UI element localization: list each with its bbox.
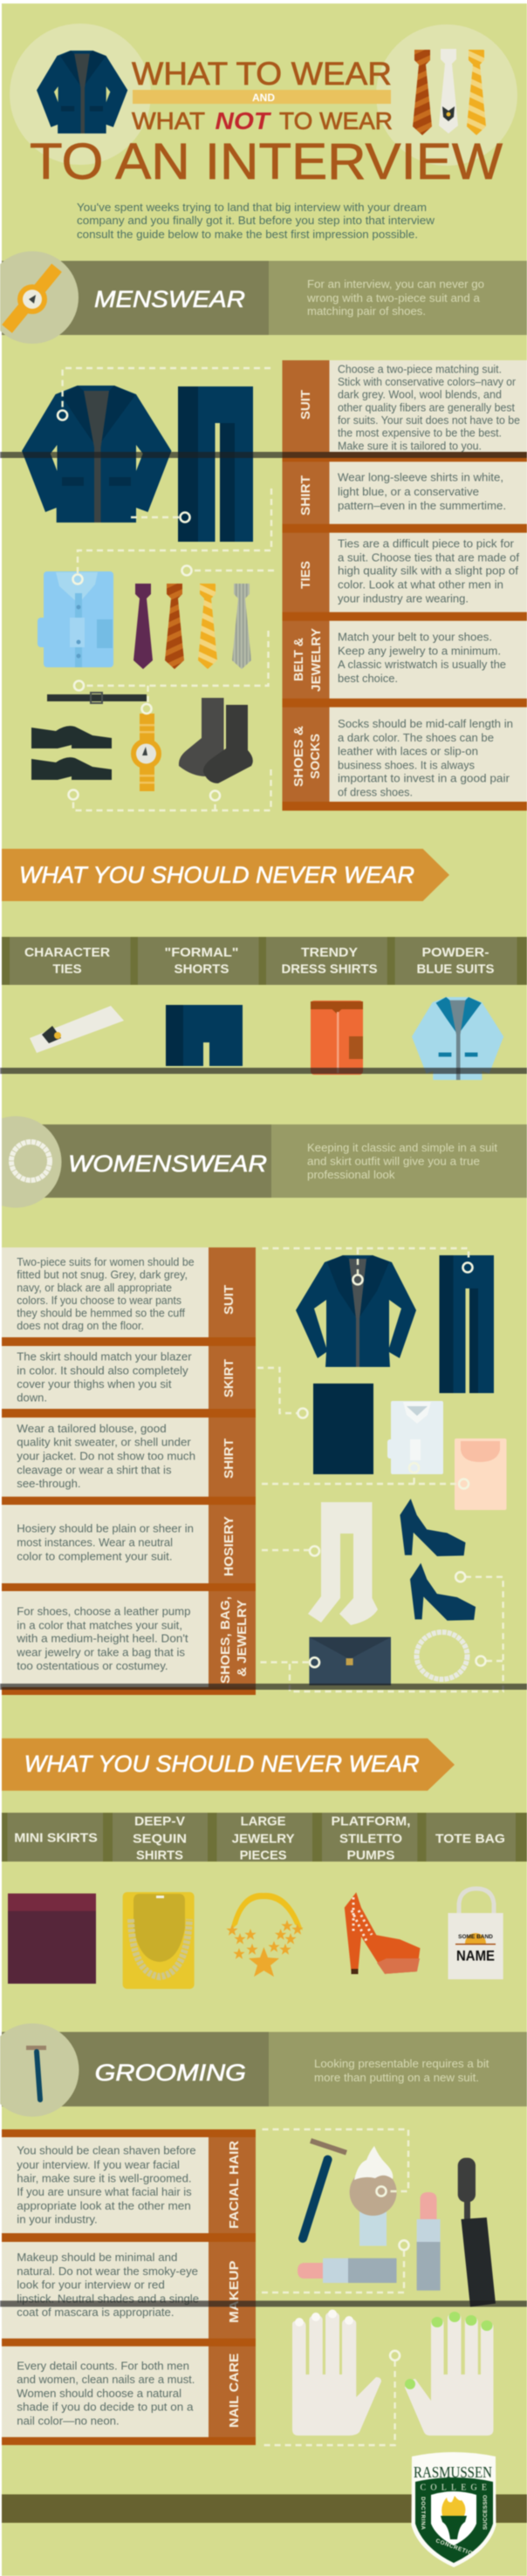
row: women hosiery: color to complement your suit. [17, 1551, 173, 1563]
row: ties [283, 533, 527, 612]
row: shirt: Wear long-sleeve shirts in white, [338, 472, 503, 484]
icon: four ties [133, 584, 251, 669]
row: women hosiery [2, 1505, 256, 1583]
row: shirt: SHIRT [299, 475, 313, 516]
panel: womenswear heading band: professional look [307, 1169, 395, 1181]
row: belt and jewelry: JEWELRY [310, 628, 324, 692]
panel: men's never wear header: BLUE SUITS [417, 962, 494, 977]
icon: women's trousers [440, 1255, 494, 1394]
womenswear connector lines [257, 1248, 503, 1691]
row: belt and jewelry: Keep any jewelry to a minimum. [338, 646, 501, 658]
row: shoes and socks: a dark color. The shoes can be [338, 732, 494, 744]
banner: what you should never wear (women) [2, 1739, 455, 1791]
panel: grooming heading band: Looking presentable requires a bit [314, 2058, 489, 2070]
row: women shoes, bag and jewelry: For shoes, choose a leather pump [17, 1605, 190, 1617]
row: women skirt: SKIRT [222, 1359, 236, 1397]
row: women shirt: SHIRT [222, 1438, 236, 1479]
icon: navy skirt [313, 1384, 373, 1474]
scan line artifacts [0, 452, 527, 2306]
row: suit: SUIT [299, 390, 313, 420]
row: women shirt: see-through. [17, 1478, 80, 1490]
row: ties: Ties are a difficult piece to pick for [338, 537, 514, 550]
panel: womenswear heading band: and skirt outfit will give you a true [307, 1156, 480, 1168]
row: makeup: Makeup should be minimal and [17, 2251, 177, 2264]
row: ties: high quality silk with a slight pop of [338, 565, 519, 577]
panel: women's never wear header: PUMPS [347, 1848, 394, 1862]
panel: women's never wear header: SEQUIN [133, 1831, 187, 1846]
row: facial hair [2, 2137, 256, 2233]
panel: womenswear heading band: Keeping it classic and simple in a suit [307, 1142, 498, 1154]
icon: trendy orange shirt [311, 1001, 363, 1075]
icon: wristwatch [131, 714, 161, 791]
menswear connector lines [58, 368, 274, 810]
panel: womenswear guide table [2, 1247, 256, 1695]
panel: men's never wear header: TIES [52, 962, 82, 977]
row: suit: other quality fibers are generally best [338, 401, 516, 413]
row: makeup [2, 2242, 256, 2339]
icon: belt [47, 693, 147, 703]
banner: what you should never wear (men) [2, 849, 449, 901]
panel: womenswear heading band: WOMENSWEAR [68, 1151, 267, 1177]
panel: women's never wear header: PLATFORM, [332, 1814, 410, 1829]
panel: men's never wear header: POWDER- [422, 946, 489, 960]
row: suit: Choose a two-piece matching suit. [338, 363, 502, 375]
icon: star necklace [226, 1893, 304, 1977]
title: AND [252, 92, 275, 104]
panel: men's never wear header: CHARACTER [24, 946, 110, 960]
row: shirt: pattern–even in the summertime. [338, 500, 506, 512]
panel: womenswear heading band [0, 1108, 527, 1216]
icon: tights [308, 1502, 378, 1625]
row: nail care [2, 2347, 256, 2437]
row: nail care: Women should choose a natural [17, 2388, 181, 2400]
row: belt and jewelry: best choice. [338, 673, 398, 685]
panel: women's never wear header: MINI SKIRTS [14, 1831, 98, 1846]
row: women shoes, bag and jewelry: in a color that matches your suit, [17, 1619, 182, 1631]
row: women suit: Two-piece suits for women should be [17, 1256, 195, 1268]
panel: women's never wear header: LARGE [241, 1814, 286, 1829]
icon: mini skirt [8, 1894, 96, 1984]
row: facial hair: appropriate look at the other men [17, 2200, 191, 2212]
panel: women's never wear header: STILETTO [339, 1831, 402, 1846]
header illustration: circle right [376, 24, 517, 166]
row: women skirt: cover your thighs when you sit [17, 1378, 172, 1390]
panel: grooming guide table [2, 2129, 256, 2445]
row: shoes and socks: leather with laces or slip-on [338, 745, 478, 757]
icon: pearl necklace [417, 1632, 468, 1679]
row: suit: for suits. Your suit does not have to be [338, 414, 520, 427]
row: women suit: colors. If you choose to wear pants [17, 1295, 181, 1307]
icon: blue dress shirt [38, 571, 113, 667]
row: facial hair: FACIAL HAIR [228, 2140, 242, 2229]
panel: grooming heading band [0, 2024, 527, 2116]
row: shoes and socks: business shoes. It is always [338, 759, 475, 771]
row: women shoes, bag and jewelry [2, 1591, 256, 1687]
row: women hosiery: HOSIERY [222, 1516, 236, 1576]
row: belt and jewelry: Match your belt to your shoes. [338, 632, 492, 644]
row: women skirt: in color. It should also completely [17, 1364, 188, 1377]
row: women skirt: down. [17, 1392, 47, 1404]
icon: razor [303, 2141, 346, 2238]
icon: white blouse [387, 1401, 443, 1474]
icon: lipstick horizontal [298, 2258, 396, 2283]
row: women suit: SUIT [222, 1285, 236, 1315]
row: women shirt: Wear a tailored blouse, good [17, 1423, 167, 1435]
icon: navy pumps [400, 1499, 476, 1621]
row: ties: TIES [299, 561, 313, 589]
row: women hosiery: most instances. Wear a neutral [17, 1537, 173, 1549]
logo: Rasmussen College shield: CONCRETIO [435, 2538, 473, 2557]
row: women suit [2, 1247, 256, 1337]
row: ties: color. Look at what other men in [338, 579, 503, 591]
row: nail care: shade if you do decide to put on a [17, 2402, 194, 2414]
panel: menswear heading band: matching pair of shoes. [307, 305, 426, 318]
icon: women's jacket [296, 1255, 416, 1367]
logo: Rasmussen College shield: RASMUSSEN [414, 2463, 492, 2481]
logo: Rasmussen College shield [412, 2452, 496, 2567]
icon: platform stiletto pump [345, 1892, 421, 1974]
icon: navy blazer [37, 51, 127, 133]
row: nail care: and women, clean nails are a must. [17, 2374, 195, 2386]
row: makeup: look for your interview or red [17, 2279, 165, 2292]
row: women shoes, bag and jewelry: with a medium-height heel. Don't [16, 1633, 188, 1645]
panel: grooming heading band: GROOMING [95, 2060, 246, 2086]
title: TO AN INTERVIEW [30, 133, 503, 190]
icon: shaving brush [350, 2146, 397, 2246]
row: shoes and socks: important to invest in a good pair [338, 773, 510, 785]
icon: character tie [30, 1006, 124, 1053]
row: nail care: nail color—no neon. [17, 2415, 120, 2427]
row: women shoes, bag and jewelry: wear jewelry or take a bag that is [16, 1646, 185, 1658]
icon: sequin shirt [123, 1892, 195, 1989]
title: WHAT TO WEAR [132, 56, 392, 92]
title: TO WEAR [279, 107, 393, 134]
panel: women's never wear header: SHIRTS [136, 1848, 183, 1862]
icon: peach shell top [455, 1438, 506, 1510]
icon: mascara [458, 2158, 496, 2306]
grooming connector lines [257, 2129, 408, 2445]
intro paragraph [77, 202, 435, 241]
row: shoes and socks: SOCKS [309, 734, 323, 779]
row: women shoes, bag and jewelry: SHOES, BAG, [219, 1596, 233, 1684]
row: suit: the most expensive to be the best. [338, 427, 502, 440]
icon: neon nails hand [405, 2312, 494, 2436]
row: nail care: Every detail counts. For both men [17, 2360, 189, 2372]
logo: Rasmussen College shield: COLLEGE [421, 2484, 487, 2493]
footer band [2, 2494, 527, 2523]
panel: menswear heading band: For an interview, you can never go [307, 278, 484, 290]
row: makeup: natural. Do not wear the smoky-eye [17, 2265, 198, 2278]
banner: what you should never wear (women): WHAT YOU SHOULD NEVER WEAR [24, 1751, 420, 1777]
panel: menswear heading band: MENSWEAR [94, 286, 245, 312]
intro paragraph: consult the guide below to make the best first impression possible. [77, 229, 418, 241]
row: facial hair: in your industry. [17, 2214, 98, 2226]
icon: lipstick vertical [417, 2192, 441, 2291]
panel: men's never wear header: DRESS SHIRTS [281, 962, 377, 977]
panel: women's never wear header: JEWELRY [232, 1831, 295, 1846]
header illustration: circle left [10, 24, 151, 165]
icon: natural nails hand [292, 2310, 381, 2436]
banner: what you should never wear (men): WHAT YOU SHOULD NEVER WEAR [19, 862, 414, 888]
row: suit [283, 360, 527, 452]
row: women shirt: quality knit sweater, or shell under [17, 1437, 191, 1449]
panel: men's never wear header: SHORTS [175, 962, 229, 977]
row: women shirt: cleavage or wear a shirt that is [17, 1464, 171, 1476]
row: women shirt: your jacket. Do not show too much [17, 1450, 195, 1462]
icon: three ties [413, 49, 486, 135]
row: suit: dark grey. Wool, wool blends, and [338, 389, 502, 401]
title: NOT [215, 107, 272, 134]
row: women suit: fitted but not snug. Grey, dark grey, [17, 1269, 188, 1281]
logo: Rasmussen College shield: DOCTRINA [420, 2497, 426, 2530]
panel: men's never wear header [2, 937, 527, 985]
panel: women's never wear header [2, 1813, 527, 1862]
icon: men's trousers [178, 386, 253, 543]
panel: menswear heading band: wrong with a two-piece suit and a [306, 292, 480, 304]
row: women shirt [2, 1418, 256, 1497]
title: WHAT [132, 107, 205, 134]
icon: tote bag: SOME BAND [458, 1934, 493, 1940]
row: ties: your industry are wearing. [338, 593, 469, 605]
icon: formal shorts [166, 1005, 243, 1066]
row: women suit: does not drag on the floor. [17, 1320, 144, 1332]
icon: clutch bag [309, 1637, 391, 1685]
row: women suit: they should be hemmed so the cuff [17, 1307, 186, 1319]
intro paragraph: You've spent weeks trying to land that big interview with your dream [77, 202, 427, 214]
row: women skirt [2, 1346, 256, 1409]
panel: women's never wear header: TOTE BAG [435, 1832, 505, 1847]
panel: women's never wear header: PIECES [240, 1848, 287, 1862]
row: shirt: light blue, or a conservative [338, 486, 479, 498]
icon: dress shoes [31, 726, 112, 780]
row: shoes and socks: SHOES & [292, 725, 306, 787]
row: women skirt: The skirt should match your blazer [17, 1350, 192, 1363]
row: ties: a suit. Choose ties that are made of [338, 551, 520, 564]
row: women hosiery: Hosiery should be plain or sheer in [17, 1523, 194, 1535]
row: makeup: coat of mascara is appropriate. [17, 2306, 174, 2319]
intro paragraph: company and you finally got it. But before you step into that interview [77, 215, 435, 227]
row: women shoes, bag and jewelry: & JEWELRY [236, 1600, 250, 1677]
row: facial hair: your interview. If you wear facial [17, 2159, 180, 2171]
panel: menswear guide table [283, 360, 527, 810]
row: facial hair: hair, make sure it is well-groomed. [17, 2172, 192, 2184]
row: facial hair: You should be clean shaven before [17, 2145, 196, 2157]
panel: men's never wear header: TRENDY [301, 946, 358, 960]
panel: grooming heading band: more than putting on a new suit. [314, 2072, 479, 2084]
icon: powder-blue suit [412, 997, 503, 1080]
row: shirt [283, 461, 527, 524]
title [30, 56, 503, 190]
row: facial hair: If you are unsure what facial hair is [17, 2186, 192, 2198]
row: makeup: MAKEUP [228, 2260, 242, 2323]
icon: men's jacket [22, 386, 171, 523]
row: suit: Make sure it is tailored to you. [338, 440, 482, 452]
panel: menswear heading band [0, 251, 527, 344]
icon: tote bag [448, 1889, 503, 1979]
row: women shoes, bag and jewelry: too ostentatious or costumey. [17, 1660, 168, 1672]
icon: tote bag: NAME [456, 1948, 495, 1964]
icon: dark socks [179, 698, 253, 783]
row: makeup: lipstick. Neutral shades and a single [17, 2292, 199, 2305]
panel: men's never wear header: "FORMAL" [164, 946, 239, 960]
panel: women's never wear header: DEEP-V [134, 1814, 185, 1829]
row: women suit: navy, or black are all appropriate [17, 1281, 172, 1294]
row: nail care: NAIL CARE [228, 2353, 242, 2428]
row: shoes and socks [283, 707, 527, 802]
logo: Rasmussen College shield: SUCCESSIO [483, 2495, 489, 2530]
row: shoes and socks: Socks should be mid-calf length in [338, 718, 513, 730]
row: belt and jewelry: A classic wristwatch is usually the [338, 659, 506, 671]
row: belt and jewelry: BELT & [292, 637, 306, 681]
row: suit: Stick with conservative colors–navy or [338, 376, 516, 388]
row: belt and jewelry [283, 621, 527, 699]
row: shoes and socks: of dress shoes. [338, 787, 413, 799]
